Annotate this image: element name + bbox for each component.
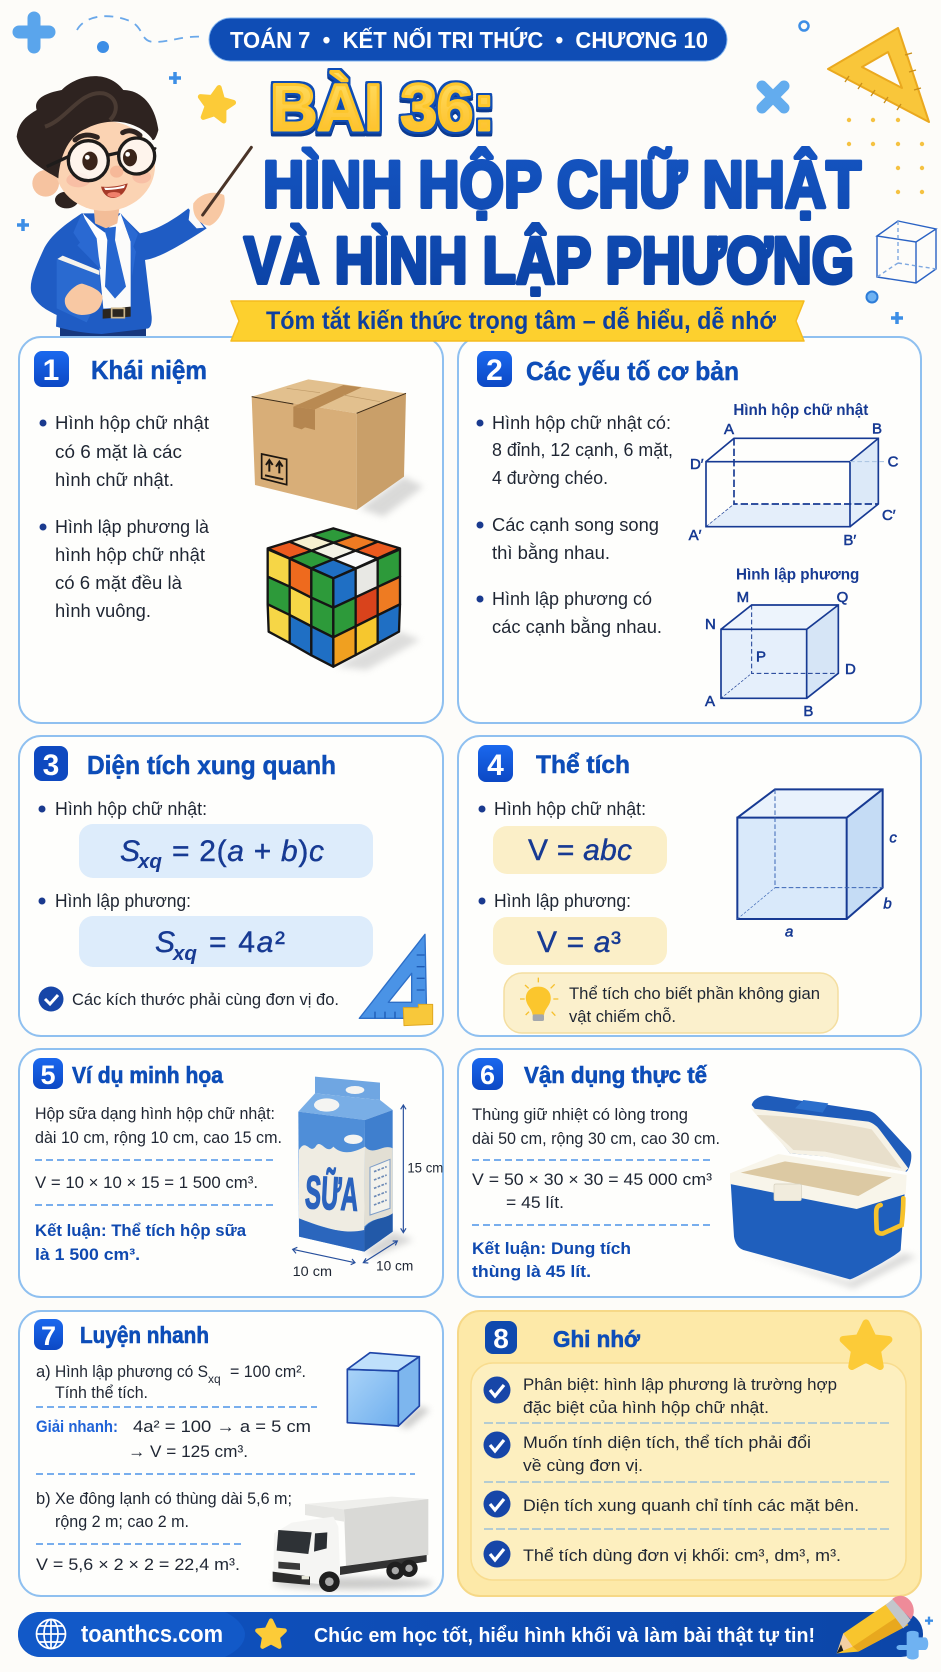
icon: blue cube — [347, 1353, 430, 1428]
exercise a: a) — [36, 1363, 51, 1381]
badge 3 — [34, 746, 68, 782]
label: cuboid: Hình hộp chữ nhật: — [494, 798, 646, 819]
formula: lateral area of cube: xq — [172, 943, 197, 965]
item 2: về cùng đơn vị. — [523, 1457, 643, 1475]
text: problem statement: Thùng giữ nhiệt có lòng trong — [472, 1106, 688, 1124]
diagram: cube MNPQ — [705, 566, 859, 720]
conclusion: thùng là 45 lít. — [472, 1262, 591, 1281]
item 2 — [484, 1432, 811, 1475]
badge 7: 7 — [41, 1321, 56, 1351]
text: definition of cube: hình hộp chữ nhật — [55, 544, 205, 565]
decoration: dashed path and dot — [77, 16, 205, 53]
formula: lateral area of cube: = 4a² — [209, 926, 285, 959]
heading: Thể tích: Thể tích — [536, 751, 630, 779]
decoration: ring bottom right — [866, 292, 878, 302]
diagram: cuboid ABCD: D′ — [690, 456, 704, 473]
calculation: V = 50 × 30 × 30 = 45 000 cm³ — [472, 1171, 713, 1189]
exercise a: xq — [208, 1372, 221, 1386]
formula: lateral area of cuboid: S — [120, 835, 140, 868]
heading: Ghi nhớ: Ghi nhớ — [553, 1326, 640, 1352]
item 2: Muốn tính diện tích, thể tích phải đổi — [523, 1434, 811, 1452]
badge 8: 8 — [493, 1323, 509, 1354]
badge 5: 5 — [40, 1060, 56, 1090]
decoration: blue times sign — [762, 86, 784, 108]
solution a — [36, 1418, 311, 1461]
heading: Vận dụng thực tế: Vận dụng thực tế — [524, 1062, 708, 1088]
item 4 — [484, 1540, 841, 1568]
label: cuboid: Hình hộp chữ nhật: — [55, 798, 207, 819]
website: toanthcs.com — [81, 1621, 223, 1648]
illustration: milk carton with dimensions: 10 cm — [376, 1258, 413, 1274]
icon: yellow set square — [828, 28, 929, 122]
note: same units — [38, 986, 339, 1012]
illustration: milk carton with dimensions: SỮA — [304, 1166, 360, 1221]
icon: pencil and plus — [837, 1596, 933, 1659]
exercise a: Tính thể tích. — [55, 1384, 148, 1402]
diagram: cuboid ABCD: B — [872, 420, 882, 437]
badge 2 — [477, 351, 512, 387]
text: definition of cube: hình vuông. — [55, 600, 151, 621]
icon: light bulb — [520, 978, 558, 1021]
illustration: blue cooler box — [730, 1096, 917, 1288]
item 3 — [484, 1490, 859, 1518]
footer banner — [18, 1596, 933, 1659]
text: cuboid elements: 4 đường chéo. — [492, 467, 608, 488]
conclusion: Kết luận: Dung tích — [472, 1239, 631, 1258]
label: cube: Hình lập phương: — [494, 890, 631, 911]
decoration: yellow star — [197, 85, 236, 122]
conclusion — [472, 1239, 631, 1281]
diagram: cuboid ABCD: A′ — [689, 527, 702, 544]
icon: gold star — [843, 1323, 889, 1366]
text: problem statement — [472, 1106, 720, 1148]
text: cube edges: Hình lập phương có — [492, 588, 652, 609]
diagram: cuboid ABCD: A — [724, 421, 734, 438]
formula: lateral area of cube — [79, 916, 373, 967]
exercise b: Xe đông lạnh có thùng dài 5,6 m; — [55, 1490, 292, 1508]
diagram: box with dimensions a, b, c — [737, 789, 897, 941]
decoration: yellow dots grid — [847, 118, 924, 194]
decoration: ring top right — [800, 22, 808, 30]
top pill: course tag — [209, 18, 727, 61]
text: problem statement: Hộp sữa dạng hình hộp chữ nhật: — [35, 1105, 275, 1123]
slogan: Chúc em học tốt, hiểu hình khối và làm bài thật tự tin! — [314, 1624, 815, 1647]
heading: Ví dụ minh họa: Ví dụ minh họa — [72, 1062, 224, 1088]
conclusion — [35, 1221, 247, 1264]
badge 1: 1 — [43, 354, 59, 387]
panel 3: Diện tích xung quanh — [19, 736, 443, 1036]
callout: meaning of volume — [504, 973, 838, 1033]
formula: lateral area of cuboid — [79, 824, 373, 878]
diagram: cube MNPQ: B — [803, 703, 813, 720]
text: parallel edges: Các cạnh song song — [492, 514, 659, 535]
diagram: cube MNPQ: Hình lập phương — [736, 566, 859, 583]
panel 4: Thể tích — [458, 736, 921, 1036]
exercise b: rộng 2 m; cao 2 m. — [55, 1513, 189, 1531]
diagram: cube MNPQ: Q — [837, 589, 848, 606]
subtitle ribbon: Tóm tắt kiến thức trọng tâm – dễ hiểu, dễ nhớ — [266, 305, 776, 335]
text: cube edges — [476, 588, 662, 637]
formula: lateral area of cuboid: = 2(a + b)c — [172, 835, 324, 868]
formula: V = abc: V = abc — [528, 834, 632, 867]
label: cube: Hình lập phương: — [55, 890, 191, 911]
top pill: course tag: TOÁN 7 • KẾT NỐI TRI THỨC • CHƯƠNG 10 — [230, 26, 708, 53]
badge 6: 6 — [480, 1060, 495, 1090]
diagram: cube MNPQ: M — [737, 589, 749, 606]
text: definition of cuboid: Hình hộp chữ nhật — [55, 412, 209, 433]
calculation — [472, 1171, 713, 1212]
text: problem statement: dài 10 cm, rộng 10 cm, cao 15 cm. — [35, 1129, 282, 1147]
solution a: → V = 125 cm³. — [128, 1443, 248, 1461]
panel 8: Ghi nhớ — [458, 1311, 921, 1596]
panel 5: Ví dụ minh họa — [19, 1049, 443, 1297]
text: parallel edges — [476, 514, 659, 563]
illustration: milk carton with dimensions: 10 cm — [293, 1263, 332, 1279]
text: definition of cuboid: có 6 mặt là các — [55, 441, 182, 462]
formula: V = a cubed: V = a³ — [537, 926, 621, 959]
solution a: 4a² = 100 → a = 5 cm — [133, 1418, 311, 1436]
solution b: V = 5,6 × 2 × 2 = 22,4 m³. — [36, 1556, 240, 1574]
text: cuboid elements — [476, 412, 673, 488]
badge 6 — [472, 1058, 503, 1090]
panel 1: Khái niệm — [19, 337, 443, 723]
icon: star — [257, 1621, 285, 1647]
badge 4 — [478, 745, 513, 782]
badge 8 — [485, 1321, 517, 1354]
inner list panel — [471, 1363, 906, 1580]
heading: Các yếu tố cơ bản: Các yếu tố cơ bản — [526, 356, 739, 386]
panel 7: Luyện nhanh — [19, 1311, 443, 1596]
diagram: box with dimensions a, b, c: c — [889, 829, 897, 846]
diagram: cube MNPQ: P — [756, 649, 766, 666]
exercise b: b) — [36, 1490, 51, 1508]
diagram: cube MNPQ: N — [705, 616, 716, 633]
illustration: milk carton with dimensions: 15 cm — [407, 1160, 443, 1176]
diagram: cuboid ABCD: Hình hộp chữ nhật — [733, 402, 869, 419]
exercise a: = 100 cm². — [230, 1363, 306, 1381]
icon: globe — [36, 1620, 66, 1648]
badge 1 — [34, 351, 69, 387]
heading: Khái niệm: Khái niệm — [91, 355, 207, 385]
badge 3: 3 — [43, 749, 59, 782]
formula: lateral area of cuboid: xq — [137, 851, 162, 873]
calculation: V = 10 × 10 × 15 = 1 500 cm³. — [35, 1174, 258, 1192]
panel 2: Các yếu tố cơ bản — [458, 337, 921, 723]
character: teacher boy with pointer — [17, 76, 251, 337]
badge 7 — [34, 1319, 63, 1351]
item 3: Diện tích xung quanh chỉ tính các mặt bên. — [523, 1497, 859, 1515]
text: parallel edges: thì bằng nhau. — [492, 542, 610, 563]
text: definition of cuboid — [40, 412, 209, 490]
text: definition of cube — [40, 516, 210, 621]
diagram: cuboid ABCD — [689, 402, 899, 549]
diagram: box with dimensions a, b, c: b — [883, 895, 892, 912]
badge 2: 2 — [486, 354, 503, 387]
conclusion: Kết luận: Thể tích hộp sữa — [35, 1221, 247, 1240]
diagram: cuboid ABCD: C — [888, 454, 899, 471]
diagram: box with dimensions a, b, c: a — [785, 924, 793, 941]
text: cuboid elements: Hình hộp chữ nhật có: — [492, 412, 671, 433]
text: definition of cube: Hình lập phương là — [55, 516, 210, 537]
calculation: = 45 lít. — [506, 1194, 564, 1212]
illustration: refrigerated truck — [273, 1497, 433, 1592]
panel 6: Vận dụng thực tế — [458, 1049, 921, 1297]
decoration: small plus signs — [17, 72, 903, 324]
icon: wire cube — [877, 221, 936, 283]
illustration: milk carton with dimensions — [293, 1077, 443, 1279]
exercise b — [36, 1490, 292, 1531]
note: same units: Các kích thước phải cùng đơn vị đo. — [72, 991, 339, 1009]
badge 5 — [33, 1058, 63, 1090]
text: cuboid elements: 8 đỉnh, 12 cạnh, 6 mặt, — [492, 439, 673, 460]
diagram: cube MNPQ: D — [845, 661, 856, 678]
callout: meaning of volume: Thể tích cho biết phần không gian — [569, 985, 820, 1003]
exercise a: Hình lập phương có S — [55, 1363, 208, 1381]
text: definition of cuboid: hình chữ nhật. — [55, 469, 174, 490]
exercise a — [36, 1363, 306, 1402]
conclusion: là 1 500 cm³. — [35, 1245, 140, 1264]
text: problem statement — [35, 1105, 282, 1147]
icon: blue set square — [359, 934, 433, 1026]
item 1: đặc biệt của hình hộp chữ nhật. — [523, 1399, 769, 1417]
heading: Diện tích xung quanh: Diện tích xung quanh — [87, 750, 336, 780]
diagram: cuboid ABCD: B′ — [843, 532, 856, 549]
text: definition of cube: có 6 mặt đều là — [55, 572, 183, 593]
callout: meaning of volume: vật chiếm chỗ. — [569, 1007, 676, 1026]
text: problem statement: dài 50 cm, rộng 30 cm, cao 30 cm. — [472, 1130, 720, 1148]
badge 4: 4 — [487, 749, 504, 782]
text: cube edges: các cạnh bằng nhau. — [492, 616, 662, 637]
icon: rubik's cube — [268, 528, 420, 670]
title line: HÌNH HỘP CHỮ NHẬT: HÌNH HỘP CHỮ NHẬT — [263, 147, 861, 221]
item 4: Thể tích dùng đơn vị khối: cm³, dm³, m³. — [523, 1547, 841, 1565]
subtitle ribbon — [231, 301, 804, 341]
item 1: Phân biệt: hình lập phương là trường hợp — [523, 1376, 837, 1394]
diagram: cuboid ABCD: C′ — [882, 507, 896, 524]
formula: lateral area of cube: S — [155, 926, 175, 959]
icon: cardboard box — [252, 379, 423, 517]
heading: Luyện nhanh: Luyện nhanh — [80, 1322, 209, 1348]
decoration: plus top left — [19, 18, 49, 47]
formula: V = abc — [493, 826, 667, 874]
diagram: cube MNPQ: A — [705, 693, 715, 710]
title line: BÀI 36: BÀI 36: — [270, 70, 495, 144]
item 1 — [484, 1376, 837, 1417]
solution a: Giải nhanh: — [36, 1418, 118, 1436]
formula: V = a cubed — [493, 917, 667, 965]
